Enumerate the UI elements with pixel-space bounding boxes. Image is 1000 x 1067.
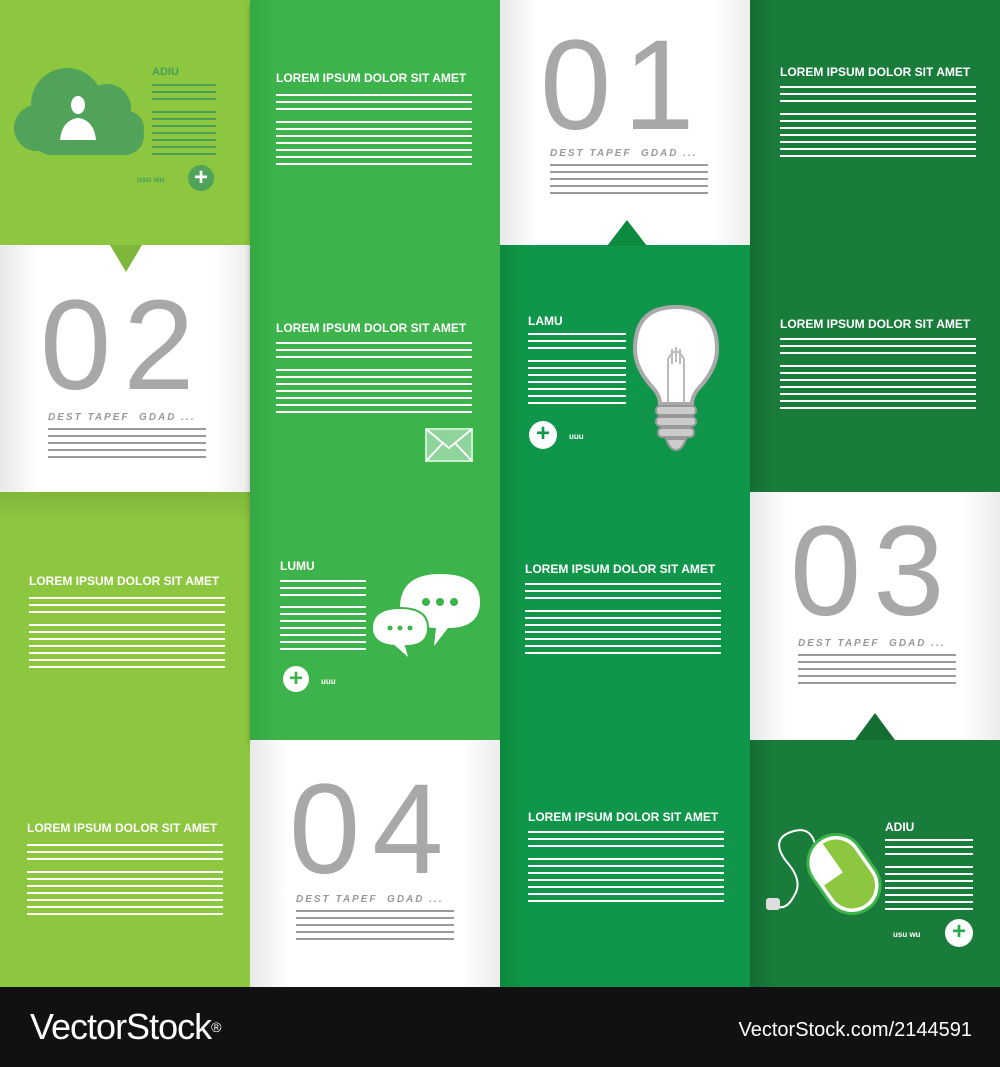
text block: col2 chat bbox=[280, 560, 366, 650]
plus: cloud panel bbox=[137, 164, 214, 191]
text block: col4 second bbox=[780, 318, 976, 409]
text block: 03: DEST TAPEF GDAD ... bbox=[798, 638, 946, 649]
text block: 01: DEST TAPEF GDAD ... bbox=[550, 148, 698, 159]
plus: col4 mouse bbox=[893, 918, 973, 947]
icon: cloud with user bbox=[14, 68, 144, 155]
pointer: col3 up triangle bbox=[607, 220, 647, 246]
column 1 backgrounds bbox=[0, 0, 250, 987]
pointer: col1 down triangle bbox=[110, 245, 142, 272]
plus: col2 chat: + bbox=[289, 665, 303, 692]
panel: 02 white bbox=[0, 245, 250, 492]
plus: col3 bulb bbox=[529, 420, 584, 449]
text block: col2 top bbox=[276, 72, 472, 165]
text block: col4 top bbox=[780, 66, 976, 157]
footer url: VectorStock.com/2144591 bbox=[739, 1019, 972, 1041]
icon: envelope bbox=[425, 428, 473, 462]
text block: col1 lower 1 bbox=[29, 575, 225, 668]
pointer: col4 up triangle bbox=[855, 713, 895, 740]
text block: 01 bbox=[550, 148, 708, 194]
text block: col2 middle bbox=[276, 322, 472, 413]
number 01: 01 bbox=[540, 14, 706, 157]
icon: light bulb bbox=[633, 305, 719, 451]
icon: mouse bbox=[766, 829, 882, 915]
column 4 backgrounds bbox=[750, 0, 1000, 987]
plus: cloud panel: + bbox=[194, 164, 208, 191]
plus: col4 mouse: + bbox=[952, 918, 966, 945]
plus: col4 mouse: usu wu bbox=[893, 930, 921, 939]
column 3 backgrounds bbox=[500, 0, 750, 987]
column 2 backgrounds bbox=[246, 0, 500, 987]
number 03: 03 bbox=[790, 500, 956, 643]
text block: cloud panel bbox=[152, 66, 216, 155]
footer bbox=[0, 987, 1000, 1067]
text block: cloud panel: ADIU bbox=[152, 66, 179, 78]
footer logo: VectorStock® bbox=[30, 1006, 220, 1047]
text block: 04: DEST TAPEF GDAD ... bbox=[296, 894, 444, 905]
text block: 03 bbox=[798, 638, 956, 684]
text block: col3 bottom bbox=[528, 811, 724, 902]
text block: col3 middle bbox=[525, 563, 721, 654]
text block: col4 mouse bbox=[885, 821, 973, 910]
plus: col2 chat bbox=[283, 665, 336, 692]
panel: light green top bbox=[0, 0, 250, 245]
text block: col1 lower 2 bbox=[27, 822, 223, 915]
plus: col3 bulb: + bbox=[536, 420, 550, 447]
plus: col3 bulb: uuu bbox=[569, 432, 584, 441]
text block: 02: DEST TAPEF GDAD ... bbox=[48, 412, 196, 423]
panel: light green bottom bbox=[0, 492, 250, 987]
number 02: 02 bbox=[40, 274, 206, 417]
icon: speech bubbles bbox=[373, 574, 480, 657]
text block: 02 bbox=[48, 412, 206, 458]
number 04: 04 bbox=[289, 758, 455, 901]
text block: col3 bulb bbox=[528, 315, 626, 404]
plus: col2 chat: uuu bbox=[321, 677, 336, 686]
text block: 04 bbox=[296, 894, 454, 940]
plus: cloud panel: usu wu bbox=[137, 175, 165, 184]
